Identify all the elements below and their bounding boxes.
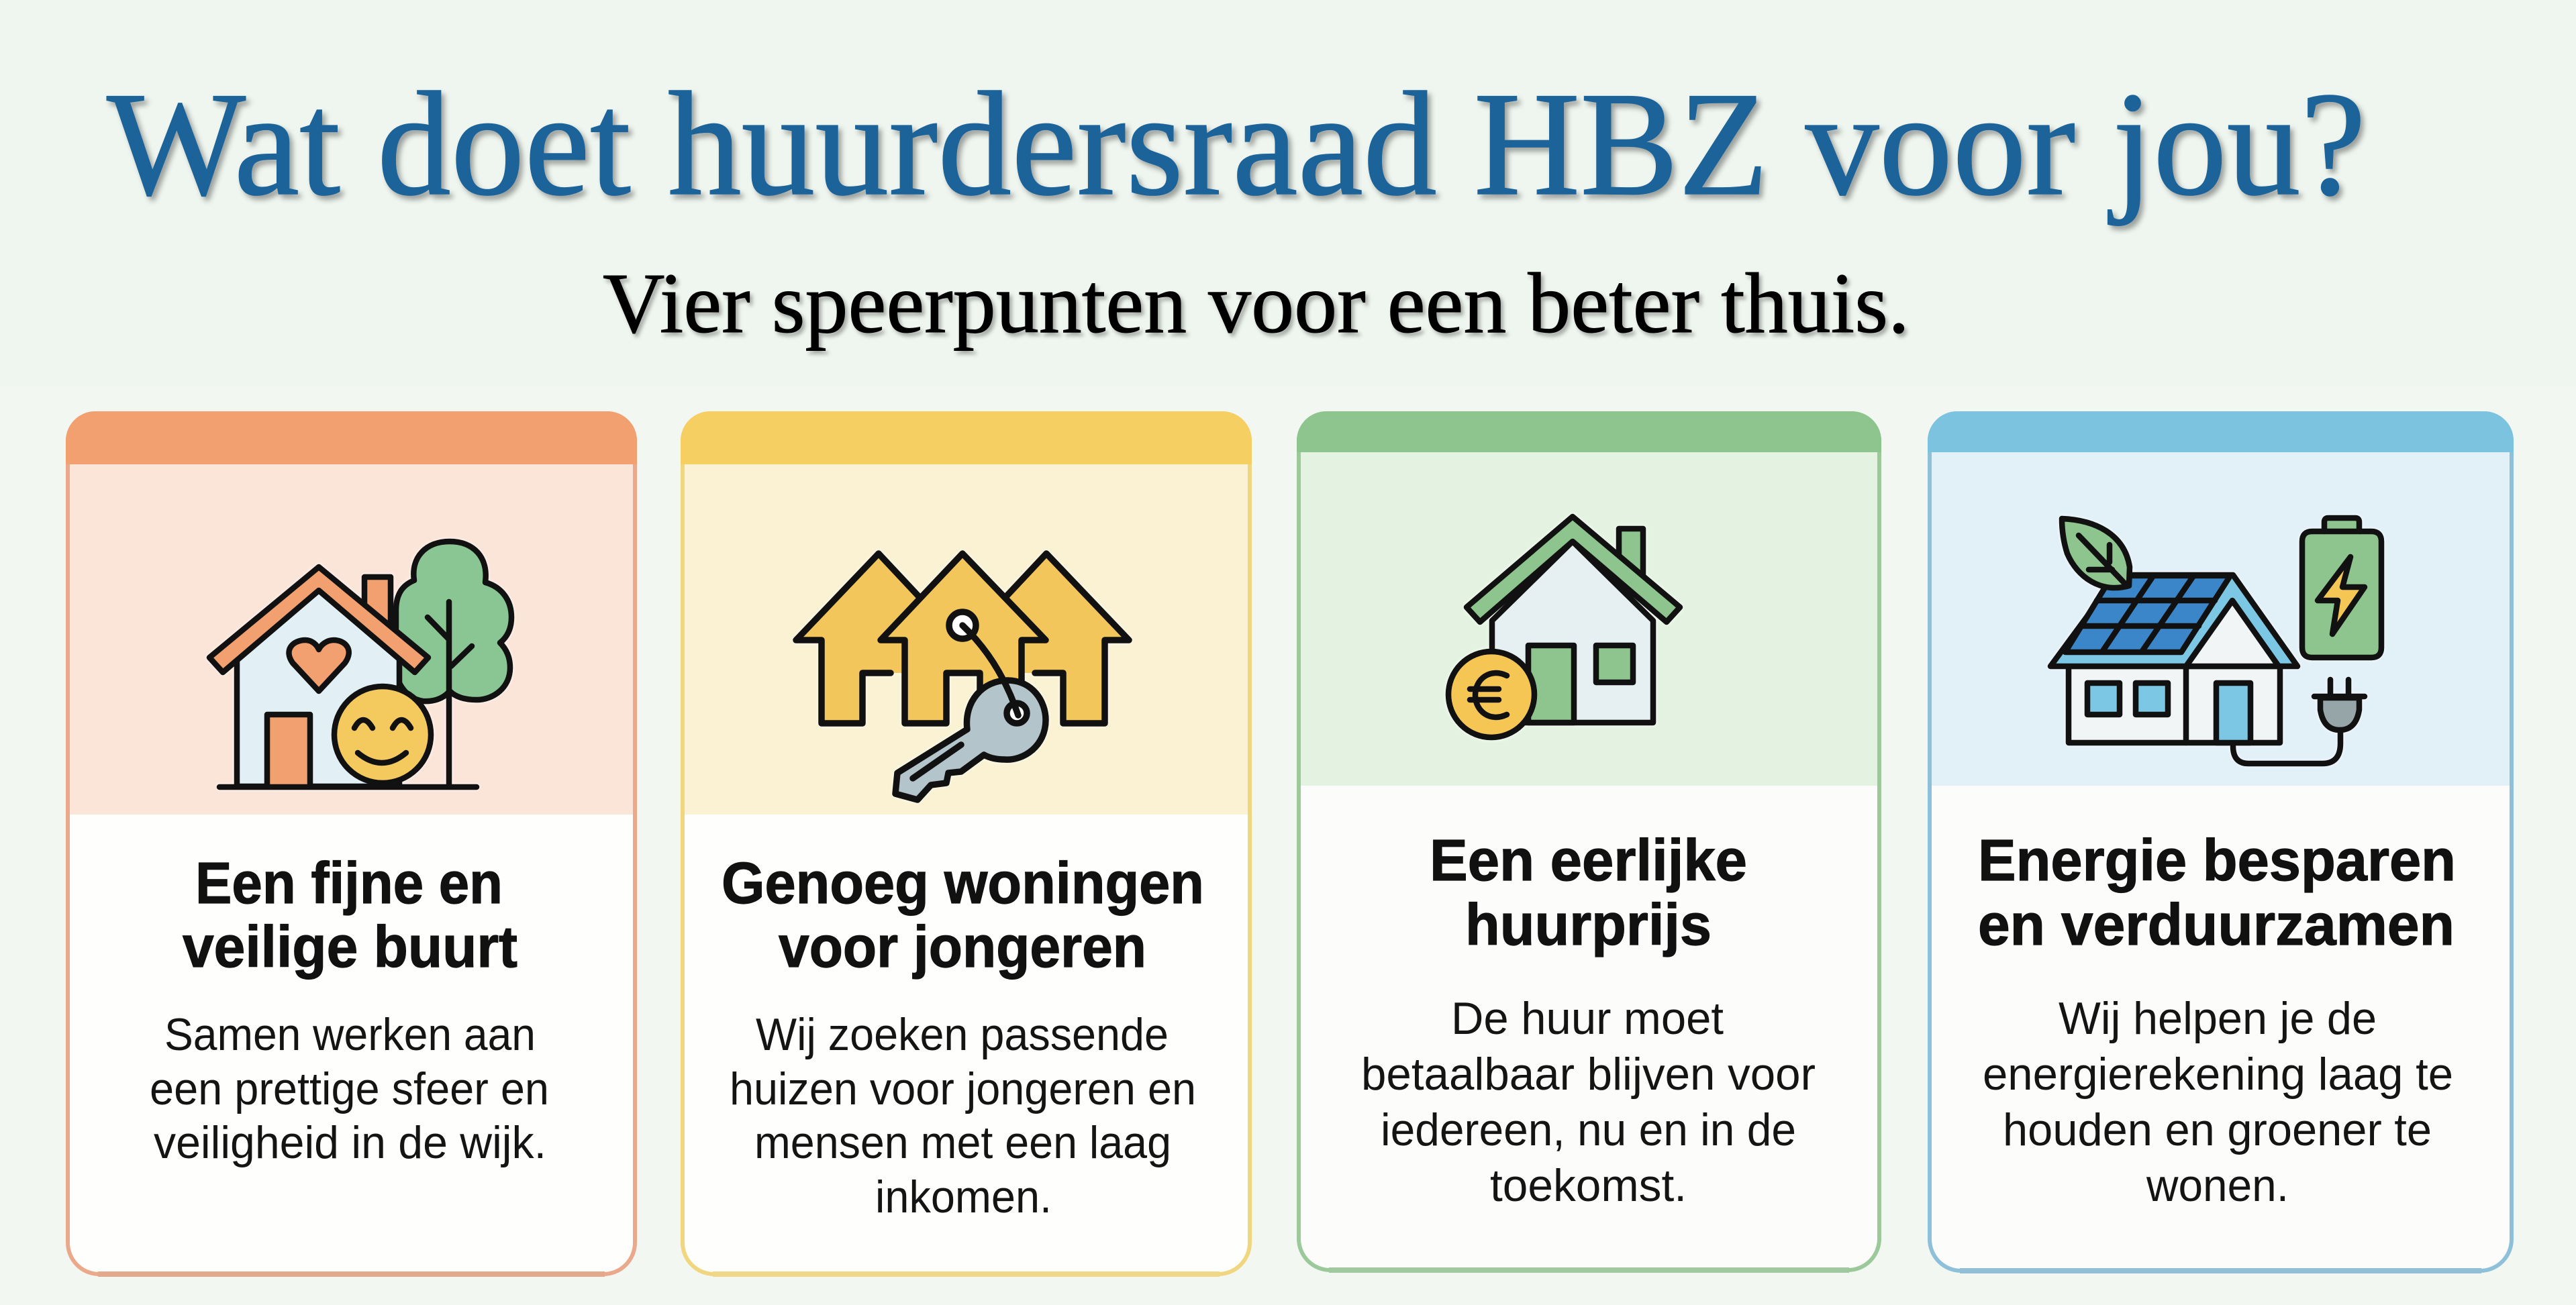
heading	[1978, 828, 2456, 957]
card illustration background	[1301, 452, 1877, 786]
heading: Een fijne en	[195, 851, 503, 916]
heading: voor jongeren	[779, 915, 1146, 980]
icon: solar house with leaf, battery and plug	[2050, 518, 2381, 764]
body text: mensen met een laag	[754, 1117, 1171, 1168]
heading: veilige buurt	[183, 915, 517, 980]
panel: een fijne en veilige buurt	[66, 411, 637, 1274]
card body	[68, 413, 635, 1274]
body text: Wij zoeken passende	[756, 1009, 1169, 1060]
body text: Wij helpen je de	[2059, 993, 2377, 1044]
title: Wat doet huurdersraad HBZ voor jou?	[107, 62, 2366, 227]
body text	[150, 1009, 549, 1168]
panel: een eerlijke huurprijs	[1297, 411, 1881, 1270]
icon: house with heart, tree and smiley	[209, 541, 511, 787]
body text	[1361, 993, 1816, 1211]
heading	[722, 851, 1204, 980]
body text: betaalbaar blijven voor	[1361, 1049, 1816, 1100]
body text	[730, 1009, 1196, 1222]
icon: house with euro coin	[1448, 517, 1680, 737]
card illustration background	[1932, 452, 2510, 786]
card illustration background	[70, 464, 633, 815]
card illustration background	[685, 464, 1248, 815]
heading: huurprijs	[1465, 892, 1712, 957]
body text: inkomen.	[875, 1171, 1052, 1222]
panel: energie besparen en verduurzamen	[1928, 411, 2514, 1271]
card top band	[66, 411, 637, 464]
heading: Energie besparen	[1978, 828, 2456, 893]
body text: veiligheid in de wijk.	[154, 1117, 546, 1168]
body text: wonen.	[2146, 1160, 2289, 1211]
card body	[1299, 413, 1879, 1270]
body text: iedereen, nu en in de	[1381, 1104, 1796, 1155]
panel: genoeg woningen voor jongeren	[681, 411, 1252, 1274]
body text: De huur moet	[1451, 993, 1724, 1044]
body text: energierekening laag te	[1983, 1049, 2453, 1100]
body text: houden en groener te	[2003, 1104, 2432, 1155]
subtitle: Vier speerpunten voor een beter thuis.	[603, 256, 1910, 351]
card top band	[681, 411, 1252, 464]
body text: huizen voor jongeren en	[730, 1063, 1196, 1114]
card top band	[1297, 411, 1881, 452]
body text	[1983, 993, 2453, 1211]
heading: Een eerlijke	[1430, 828, 1747, 893]
card body	[683, 413, 1250, 1274]
body text: Samen werken aan	[164, 1009, 536, 1060]
card body	[1930, 413, 2512, 1271]
heading	[1430, 828, 1747, 957]
heading: Genoeg woningen	[722, 851, 1204, 916]
icon: three houses with key	[796, 554, 1129, 800]
body text: toekomst.	[1490, 1160, 1687, 1211]
heading	[183, 851, 517, 980]
body text: een prettige sfeer en	[150, 1063, 549, 1114]
heading: en verduurzamen	[1978, 892, 2455, 957]
card top band	[1928, 411, 2514, 452]
